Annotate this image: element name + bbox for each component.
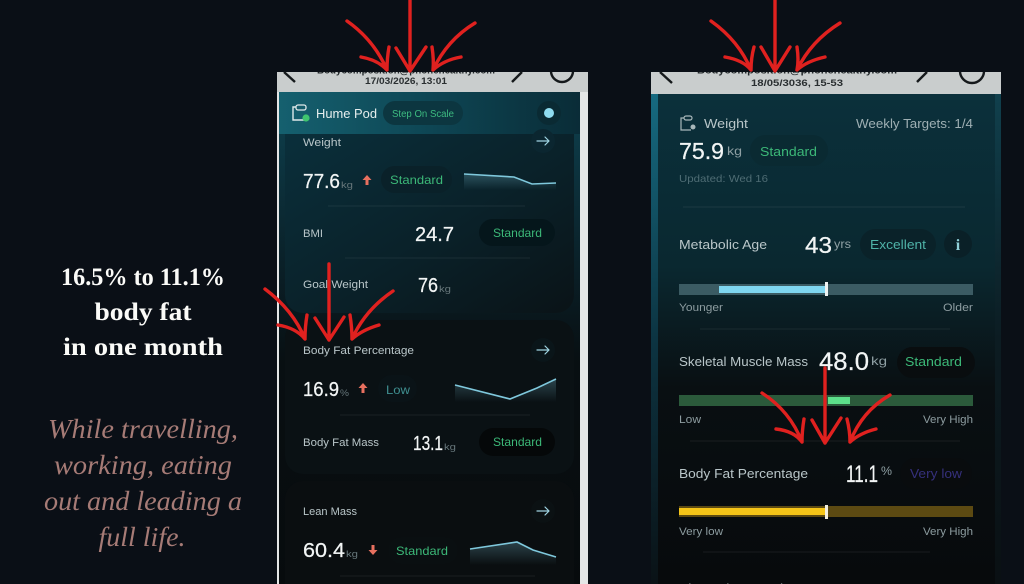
subtext: while travelling: out and leading a	[44, 486, 242, 516]
metric: weight: Weight	[704, 116, 748, 131]
metric: weight: kg	[727, 144, 742, 158]
metric: metabolic age: Metabolic Age	[679, 237, 767, 252]
metric: weight: Weekly Targets: 1/4	[856, 116, 973, 131]
metric: skeletal muscle mass	[679, 347, 975, 426]
metric: body fat percentage: Low	[386, 383, 410, 397]
subtext: while travelling	[44, 414, 242, 552]
metric: weight: Standard	[390, 173, 443, 187]
bar: body fat	[679, 505, 973, 519]
metric: body fat mass	[303, 428, 555, 456]
headline: body fat result	[61, 264, 225, 361]
metric: body fat percentage: Very low	[910, 466, 963, 481]
metric: weight: kg	[341, 180, 353, 190]
metric: BMI: Standard	[493, 226, 542, 240]
metric: metabolic age: 43	[805, 232, 832, 258]
subtext: while travelling: While travelling,	[48, 414, 238, 444]
card: body fat	[285, 320, 574, 474]
metric: body fat percentage: 16.9	[303, 379, 339, 401]
bar: skeletal muscle	[679, 395, 973, 406]
metric: goal weight	[303, 275, 451, 297]
card: lean mass: Standard	[396, 544, 448, 558]
arrows: pointing at second body fat	[762, 368, 890, 443]
metric: metabolic age: Older	[943, 302, 973, 314]
device bar: Hume Pod: Step On Scale	[392, 109, 454, 120]
metric: weight	[303, 129, 556, 193]
device bar: Hume Pod	[279, 92, 580, 134]
bar: metabolic age	[679, 282, 973, 296]
card: lean mass: kg	[346, 549, 358, 559]
metric: body fat percentage: Body Fat Percentage	[303, 345, 414, 357]
metric: skeletal muscle mass: kg	[871, 354, 887, 368]
app header bar: 17/03/2026, 13:01	[365, 76, 447, 86]
metric: goal weight: 76	[418, 275, 438, 297]
headline: body fat result: in one month	[63, 334, 223, 361]
metric: weight: Standard	[760, 144, 817, 159]
card: lean mass: 60.4	[303, 540, 345, 562]
metric: metabolic age	[679, 229, 973, 314]
metric: body fat mass: kg	[444, 442, 456, 452]
metric: BMI	[303, 219, 555, 246]
app header bar: Bodycomposition@phonehealthy.com	[697, 66, 897, 76]
card: weight, BMI, goal weight	[285, 129, 574, 313]
metric: goal weight: Goal Weight	[303, 279, 368, 291]
metric: body fat percentage: %	[881, 464, 892, 478]
metric: skeletal muscle mass: Low	[679, 414, 701, 426]
metric: goal weight: kg	[439, 284, 451, 294]
metric: skeletal muscle mass: Standard	[905, 354, 962, 369]
metric: weight: Weight	[303, 137, 341, 149]
metric: body fat percentage	[679, 458, 973, 538]
card: lean mass: Lean Mass	[303, 506, 357, 518]
metric: metabolic age: Excellent	[870, 237, 926, 252]
metric: body fat percentage: %	[340, 388, 349, 398]
app header bar	[651, 72, 1001, 94]
metric: body fat percentage: 11.1	[846, 461, 878, 488]
headline: body fat result: 16.5% to 11.1%	[61, 264, 225, 291]
metric: skeletal muscle mass: 48.0	[819, 348, 869, 376]
metric: body fat percentage	[303, 338, 556, 402]
metric: weight: 75.9	[679, 138, 724, 164]
right edge strip	[995, 94, 1001, 584]
metric: weight	[679, 116, 973, 185]
arrows: pointing at first body fat	[265, 264, 393, 340]
metric: BMI: 24.7	[415, 224, 454, 246]
subtext: while travelling: working, eating	[54, 450, 232, 480]
card: lean mass	[285, 481, 574, 584]
device bar: Hume Pod: Hume Pod	[316, 106, 377, 121]
metric: metabolic age: i	[956, 237, 961, 254]
metric: weight: Updated: Wed 16	[679, 173, 768, 185]
metric: BMI: BMI	[303, 228, 323, 240]
metric: skeletal muscle mass: Skeletal Muscle Mass	[679, 354, 809, 369]
phone frame	[277, 72, 588, 584]
metric: body fat mass: Standard	[493, 435, 542, 449]
metric: weight: 77.6	[303, 171, 340, 193]
panel: phone screenshot after	[651, 59, 1001, 584]
metric: body fat percentage: Very High	[923, 526, 973, 538]
metric: metabolic age: yrs	[834, 237, 851, 251]
app header bar	[277, 72, 588, 92]
app header bar: 18/05/3036, 15-53	[751, 78, 843, 89]
headline: body fat result: body fat	[94, 299, 192, 326]
metric: skeletal muscle mass: Very High	[923, 414, 973, 426]
panel: phone screenshot before	[277, 60, 588, 584]
left edge strip	[651, 94, 658, 584]
arrows: pointing at second date	[711, 0, 840, 71]
screen body	[279, 92, 580, 584]
metric: body fat mass: 13.1	[413, 433, 443, 455]
subtext: while travelling: full life.	[98, 522, 186, 552]
metric: body fat percentage: Very low	[679, 526, 723, 538]
screen body	[651, 94, 1001, 584]
metric: body fat mass: Body Fat Mass	[303, 437, 380, 449]
metric: metabolic age: Younger	[679, 302, 723, 314]
metric: body fat percentage: Body Fat Percentage	[679, 466, 808, 481]
app header bar: Bodycomposition@phonehealthy.com	[317, 66, 495, 76]
arrows: pointing at first date	[347, 0, 475, 71]
